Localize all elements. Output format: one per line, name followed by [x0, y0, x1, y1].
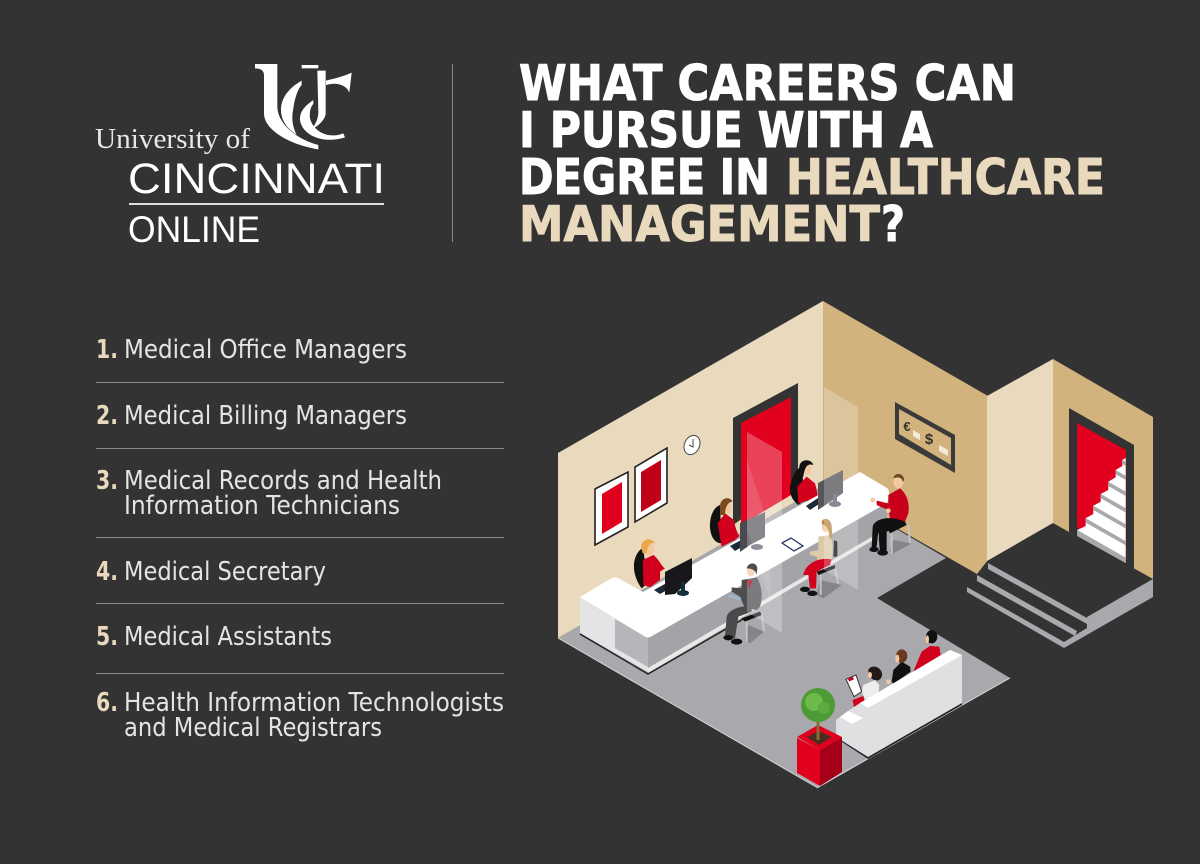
right wall [823, 301, 988, 574]
list item 2: Medical Billing Managers [124, 401, 407, 431]
list item 1: Medical Office Managers [124, 335, 407, 365]
customer: woman in red trousers [800, 519, 842, 598]
list item 2: 2. [96, 401, 118, 431]
list item 5: Medical Assistants [124, 622, 332, 652]
title [519, 55, 1105, 253]
list item 3: Medical Records and Health [124, 466, 442, 496]
potted plant [797, 688, 842, 786]
title: WHAT CAREERS CAN [519, 55, 1016, 112]
list item 6: and Medical Registrars [124, 713, 382, 743]
title: DEGREE IN [519, 149, 770, 206]
customer: man in red jumper [869, 474, 912, 556]
floor [558, 486, 1010, 788]
logo: University of Cincinnati Online [95, 64, 385, 250]
title: HEALTHCARE [786, 149, 1105, 206]
doorway with stairs [1069, 408, 1134, 570]
list item 4: 4. [96, 557, 118, 587]
left wall [558, 301, 823, 638]
staff member 1 [634, 539, 665, 588]
list item 3: Information Technicians [124, 491, 400, 521]
computer monitors [654, 470, 843, 596]
list item 3 [96, 466, 442, 521]
icon: wall clock [681, 433, 703, 457]
title: ? [881, 196, 905, 253]
glass partitions [747, 387, 858, 633]
list item 6 [96, 688, 504, 743]
alcove right wall [1053, 359, 1153, 579]
logo text: Cincinnati: CINCINNATI [128, 155, 385, 203]
back door [733, 383, 798, 525]
currency exchange board: € [903, 419, 911, 434]
customer: man in grey suit [723, 563, 764, 645]
list item 1: 1. [96, 335, 118, 365]
staff member 3 [790, 460, 817, 505]
raised platform and steps [967, 563, 1153, 648]
illustration: isometric healthcare reception office [558, 301, 1153, 788]
wall pictures [595, 448, 667, 545]
paperwork on desk [782, 538, 803, 551]
careers list [96, 335, 504, 743]
list item 5: 5. [96, 622, 118, 652]
currency exchange board: $ [925, 431, 934, 448]
logo text: University of: University of [95, 124, 251, 155]
reception desk [580, 472, 889, 674]
logo text: Online: ONLINE [128, 209, 260, 250]
currency exchange board [895, 402, 955, 473]
icon: interlocked UC monogram [255, 64, 352, 149]
title: I PURSUE WITH A [519, 102, 933, 159]
waiting customers on sofa [846, 630, 941, 707]
list item 6: Health Information Technologists [124, 688, 504, 718]
list item 6: 6. [96, 688, 118, 718]
alcove wall [987, 359, 1053, 561]
staff member 2 [710, 498, 739, 547]
sofa [836, 650, 962, 759]
list item 4: Medical Secretary [124, 557, 326, 587]
title: MANAGEMENT [519, 196, 881, 253]
list item 3: 3. [96, 466, 118, 496]
